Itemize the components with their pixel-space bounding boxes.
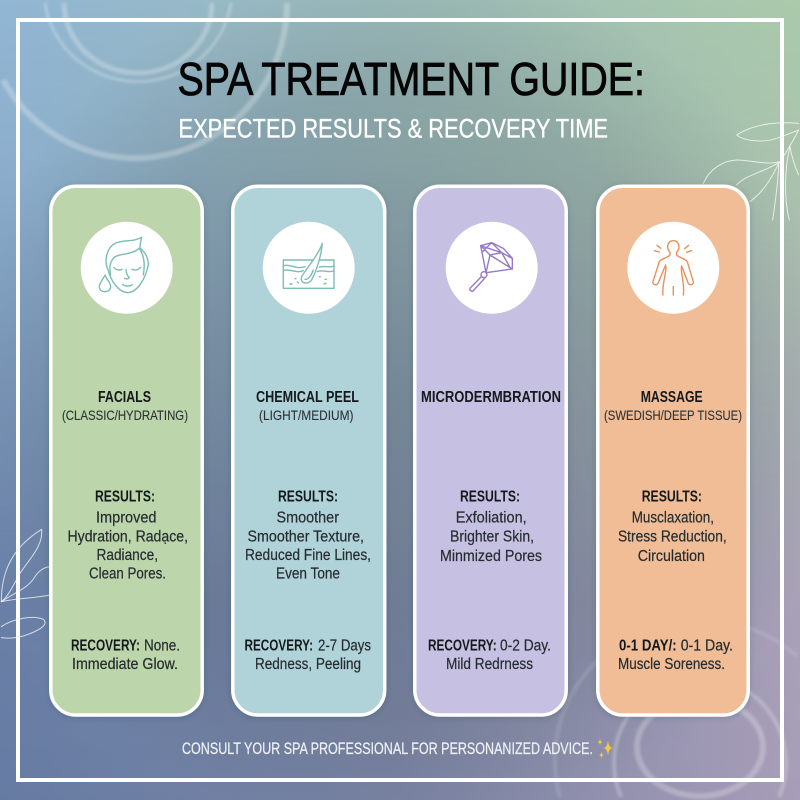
recovery: Immediate Glow. bbox=[72, 656, 178, 673]
treatment name: MICRODERMBRATION bbox=[421, 389, 561, 406]
results list bbox=[245, 510, 371, 583]
decorative water ripples, bottom right bbox=[555, 620, 797, 797]
decorative leaf, bottom left bbox=[1, 529, 50, 638]
recovery: Redness, Peeling bbox=[255, 656, 361, 673]
recovery: Muscle Soreness. bbox=[618, 656, 725, 673]
results heading: RESULTS: bbox=[278, 489, 338, 506]
recovery: RECOVERY: bbox=[71, 638, 140, 655]
recovery bbox=[71, 638, 180, 673]
panel: microdermabrasion bbox=[415, 186, 566, 715]
icon: human body with tension marks bbox=[627, 222, 719, 314]
results list: Musclaxation, bbox=[632, 510, 714, 527]
card background bbox=[415, 186, 566, 715]
recovery: RECOVERY: bbox=[428, 638, 497, 655]
recovery bbox=[244, 638, 371, 673]
icon: diamond tip wand bbox=[446, 222, 538, 314]
results list: Minmized Pores bbox=[440, 548, 542, 565]
card background bbox=[598, 186, 748, 715]
title: SPA TREATMENT GUIDE: bbox=[178, 53, 645, 105]
treatment name: MASSAGE bbox=[641, 389, 703, 406]
recovery: None. bbox=[144, 638, 180, 655]
panel: massage bbox=[598, 186, 748, 715]
recovery bbox=[428, 638, 551, 673]
results list: Even Tone bbox=[276, 566, 340, 583]
icon: skin layers with hair follicle bbox=[263, 222, 355, 314]
recovery: 2-7 Days bbox=[318, 638, 371, 655]
footer note: CONSULT YOUR SPA PROFESSIONAL FOR PERSONANIZED ADVICE. bbox=[182, 740, 593, 758]
results list: Smoother Texture, bbox=[248, 528, 364, 546]
card background bbox=[51, 186, 202, 715]
panel: chemical peel bbox=[233, 186, 385, 715]
panel: facials bbox=[51, 186, 202, 715]
results list: Circulation bbox=[638, 548, 705, 565]
icon: face with drop bbox=[81, 222, 173, 314]
recovery: RECOVERY: bbox=[244, 638, 313, 655]
recovery: 0-1 DAY/: bbox=[619, 638, 677, 655]
results list bbox=[68, 510, 188, 583]
results list bbox=[618, 510, 727, 565]
treatment type: (CLASSIC/HYDRATING) bbox=[62, 407, 188, 423]
recovery bbox=[618, 638, 733, 673]
treatment name: CHEMICAL PEEL bbox=[256, 389, 359, 406]
recovery: 0-1 Day. bbox=[681, 638, 733, 655]
results list: Improved bbox=[96, 510, 156, 527]
results list: Hydration, Radạce, bbox=[68, 528, 188, 546]
results list: Smoother bbox=[276, 510, 339, 527]
recovery: Mild Redrness bbox=[446, 656, 533, 673]
results list: Reduced Fine Lines, bbox=[245, 547, 371, 564]
treatment type: (SWEDISH/DEEP TISSUE) bbox=[604, 407, 742, 423]
results list: Radiance, bbox=[96, 547, 158, 564]
treatment type: (LIGHT/MEDIUM) bbox=[259, 407, 354, 423]
decorative leaf, top right bbox=[703, 123, 799, 220]
results list: Clean Pores. bbox=[89, 566, 166, 583]
icon: sparkles bbox=[598, 738, 612, 758]
results list: Brighter Skin, bbox=[450, 529, 534, 546]
subtitle: EXPECTED RESULTS & RECOVERY TIME bbox=[178, 114, 608, 144]
decorative water ripples, top left bbox=[3, 3, 287, 158]
results list: Stress Reduction, bbox=[618, 529, 727, 546]
results list bbox=[440, 510, 542, 565]
card background bbox=[233, 186, 385, 715]
results heading: RESULTS: bbox=[95, 489, 155, 506]
results heading: RESULTS: bbox=[642, 489, 702, 506]
treatment name: FACIALS bbox=[98, 389, 151, 406]
results heading: RESULTS: bbox=[460, 489, 520, 506]
recovery: 0-2 Day. bbox=[500, 638, 551, 655]
results list: Exfoliation, bbox=[456, 510, 527, 527]
